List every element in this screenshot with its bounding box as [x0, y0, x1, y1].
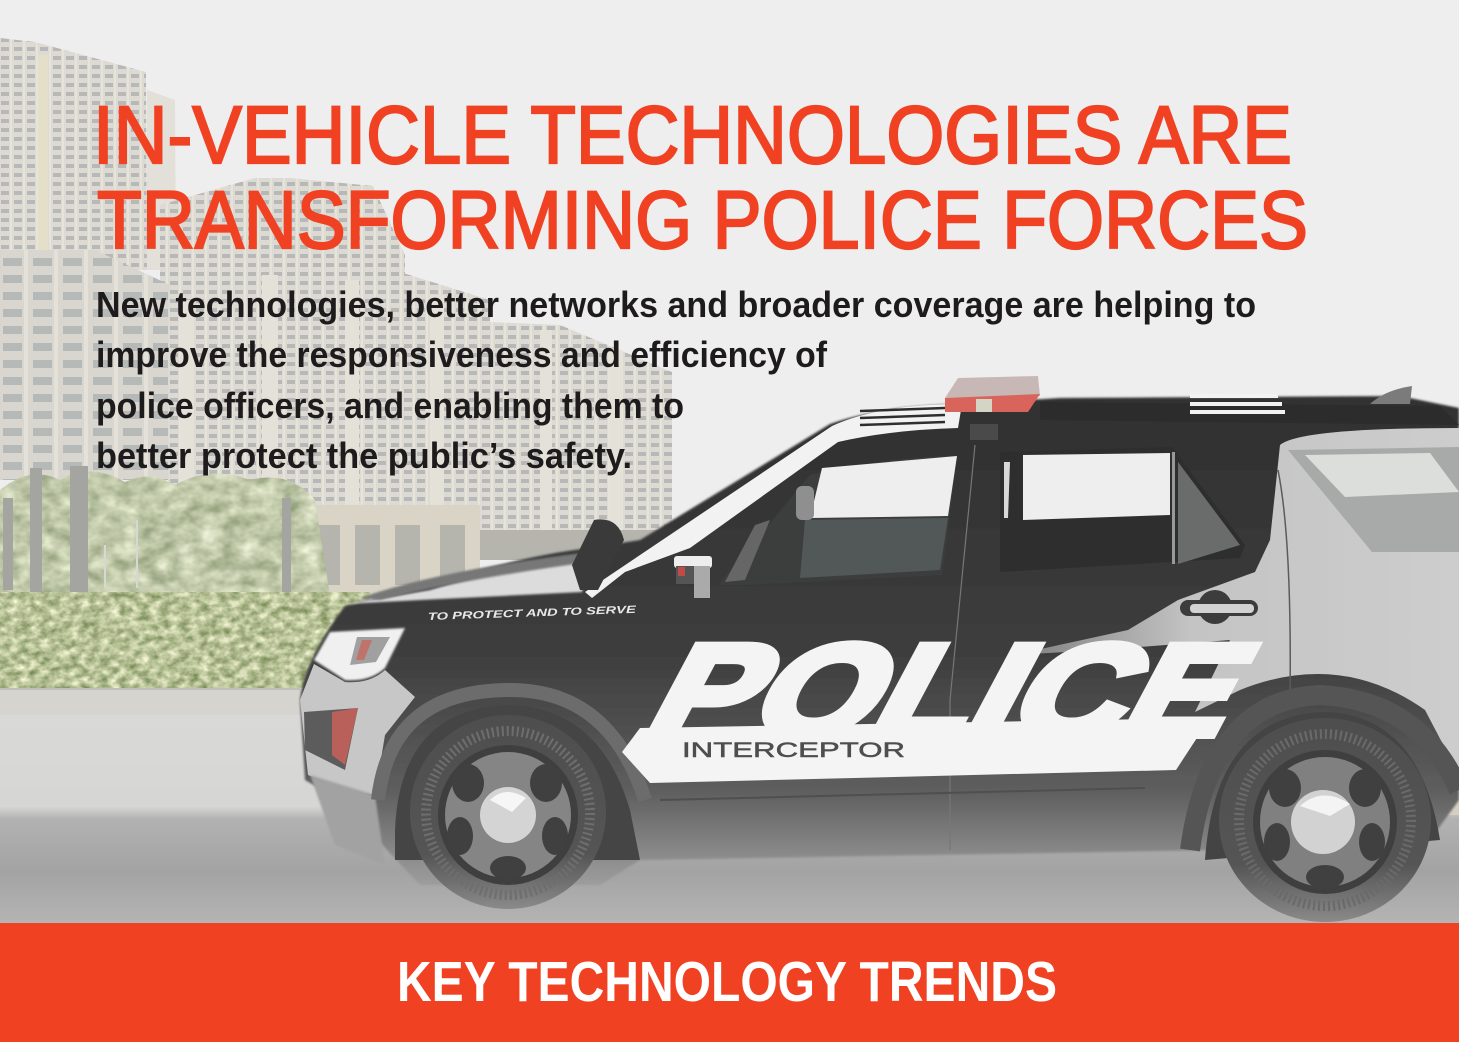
- door seam: [950, 445, 975, 850]
- posts and street lamps: [3, 466, 291, 593]
- POLICE lettering: POLICE: [625, 618, 1280, 763]
- front wheel: [410, 715, 606, 909]
- roof light bar: [945, 376, 1040, 440]
- intro paragraph: improve the responsiveness and efficiency of: [96, 334, 828, 375]
- door line: [1278, 470, 1290, 700]
- windshield and roof stripe: [585, 404, 962, 598]
- hood slogan: TO PROTECT AND TO SERVE: [428, 604, 637, 623]
- wing mirror: [572, 519, 624, 590]
- hedge: [0, 592, 370, 690]
- rear quarter window: [1288, 447, 1459, 552]
- title: [93, 90, 1308, 266]
- roof rails: [1040, 386, 1459, 425]
- headlight: [314, 628, 405, 680]
- rear light panel: [1013, 428, 1459, 775]
- sill line: [660, 788, 1145, 800]
- trees: [0, 471, 330, 595]
- footer banner: [0, 923, 1459, 1042]
- intro paragraph: better protect the public’s safety.: [96, 435, 632, 476]
- rear wheel arch: [1190, 695, 1459, 850]
- intro paragraph: New technologies, better networks and broader coverage are helping to: [96, 284, 1256, 325]
- title: TRANSFORMING POLICE FORCES: [97, 175, 1308, 266]
- INTERCEPTOR wordmark: INTERCEPTOR: [682, 739, 905, 762]
- police car: [300, 376, 1459, 922]
- title: IN-VEHICLE TECHNOLOGIES ARE: [93, 90, 1292, 181]
- spotlight: [674, 556, 712, 598]
- city skyline background: [0, 38, 672, 595]
- road and pavement: [0, 688, 1459, 923]
- door handle: [1180, 590, 1258, 624]
- footer heading: KEY TECHNOLOGY TRENDS: [397, 950, 1057, 1014]
- intro paragraph: police officers, and enabling them to: [96, 385, 684, 426]
- rear wheel: [1219, 718, 1431, 922]
- front wheel arch: [378, 690, 645, 800]
- intro paragraph: [96, 284, 1256, 476]
- rear side window: [1000, 447, 1245, 572]
- front bumper panel: [300, 664, 415, 795]
- white police band: [622, 718, 1210, 783]
- hood highlight: [345, 556, 590, 604]
- front side window: [718, 456, 957, 585]
- car body: [300, 396, 1459, 885]
